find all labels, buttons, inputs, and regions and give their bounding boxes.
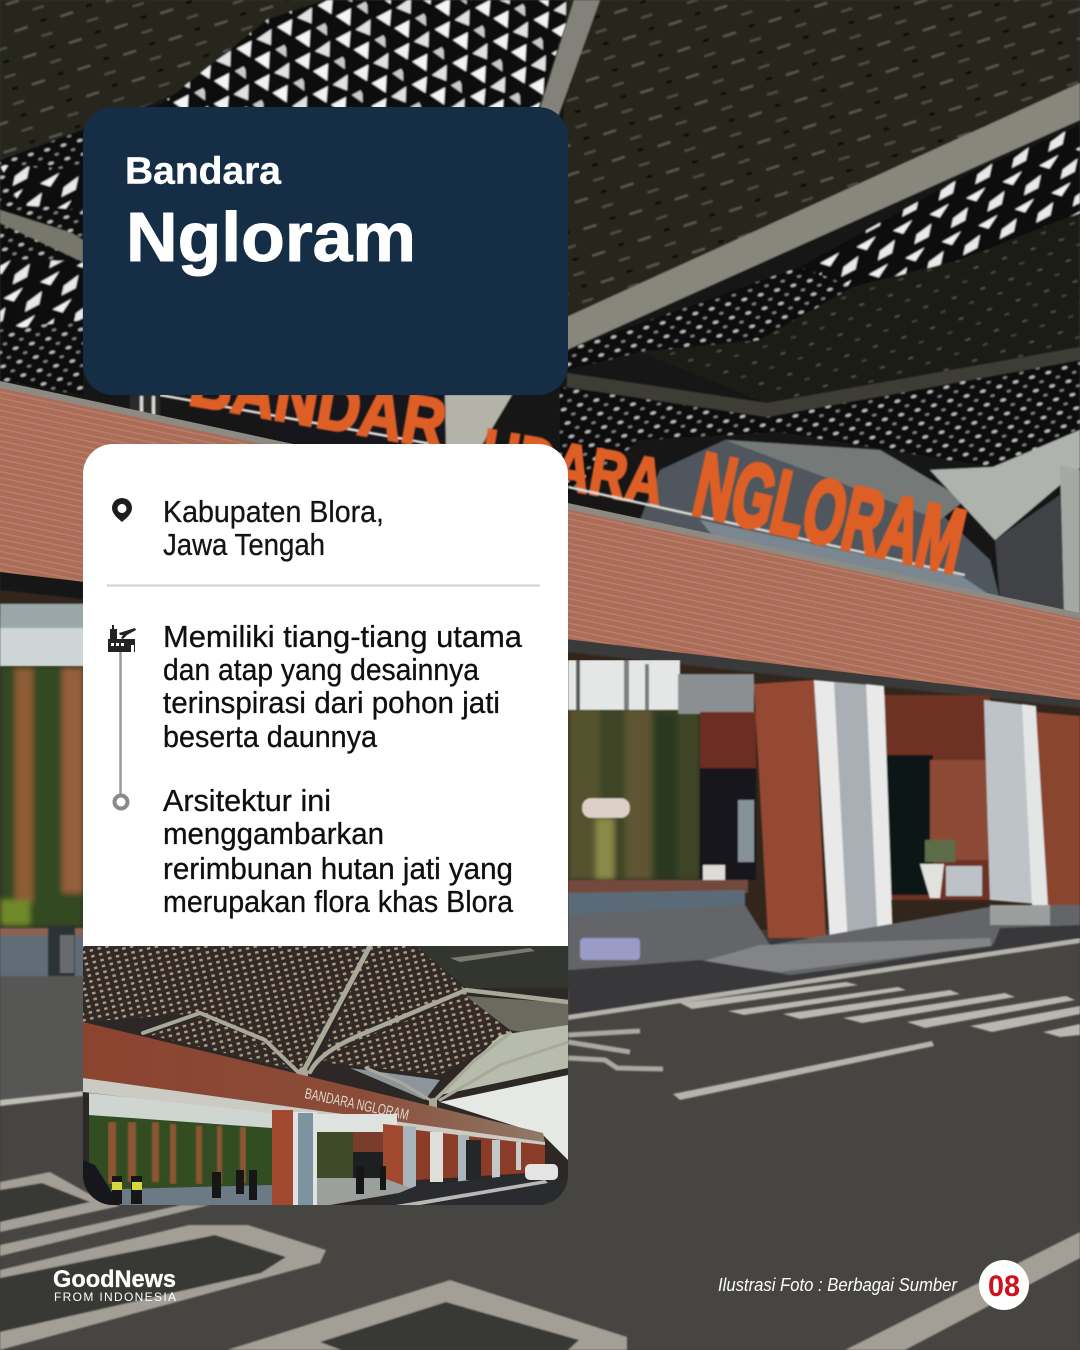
card photo: terminal exterior [83, 946, 568, 1205]
heading: Bandara: Bandara [125, 150, 282, 192]
parapet coping [0, 381, 1080, 619]
page number badge [979, 1260, 1029, 1310]
description: architecture: menggambarkan [163, 816, 384, 851]
description: pillars and roof: beserta daunnya [163, 719, 378, 754]
green walls [0, 666, 700, 928]
tree-shaped columns [143, 946, 568, 1110]
sign: BANDAR UDARA NGLORAM: BANDAR [184, 342, 452, 464]
logo: GoodNews from Indonesia: GoodNews [53, 1266, 176, 1293]
visitors [112, 1166, 386, 1204]
description: pillars and roof: dan atap yang desainnya [163, 652, 480, 687]
brick fascia [0, 385, 1080, 700]
description: pillars and roof: Memiliki tiang-tiang utama [163, 619, 523, 654]
road markings [0, 938, 1080, 1350]
sign lettering: BANDARA NGLORAM [303, 1085, 410, 1124]
description: architecture: Arsitektur ini [163, 783, 331, 818]
location text: Jawa Tengah [163, 527, 325, 562]
heading: Ngloram: Ngloram [126, 198, 416, 276]
terminal lower level [0, 590, 1080, 930]
parking bay markings [0, 1172, 120, 1232]
description: architecture: rerimbunan hutan jati yang [163, 851, 513, 886]
icon: location pin [112, 498, 132, 522]
description: pillars and roof: terinspirasi dari pohon jati [163, 685, 500, 720]
location text [163, 494, 384, 562]
icon: airport tower and plane [108, 625, 136, 652]
info card [83, 444, 568, 950]
title panel [83, 107, 568, 395]
logo: GoodNews from Indonesia: FROM INDONESIA [54, 1290, 176, 1304]
page number badge: 08 [988, 1270, 1020, 1303]
sidewalk and asphalt [568, 905, 1080, 990]
description: architecture [163, 783, 514, 919]
photo credit: Ilustrasi Foto : Berbagai Sumber [718, 1275, 958, 1295]
description: pillars and roof [163, 619, 523, 754]
description: architecture: merupakan flora khas Blora [163, 884, 514, 919]
sign: BANDAR UDARA NGLORAM: UDARA [476, 415, 670, 520]
sign: BANDAR UDARA NGLORAM [160, 342, 973, 593]
location text: Kabupaten Blora, [163, 494, 384, 529]
timeline connector [114, 650, 128, 808]
sign backdrop and side canopy [445, 395, 512, 445]
roof canopy [0, 0, 1080, 620]
